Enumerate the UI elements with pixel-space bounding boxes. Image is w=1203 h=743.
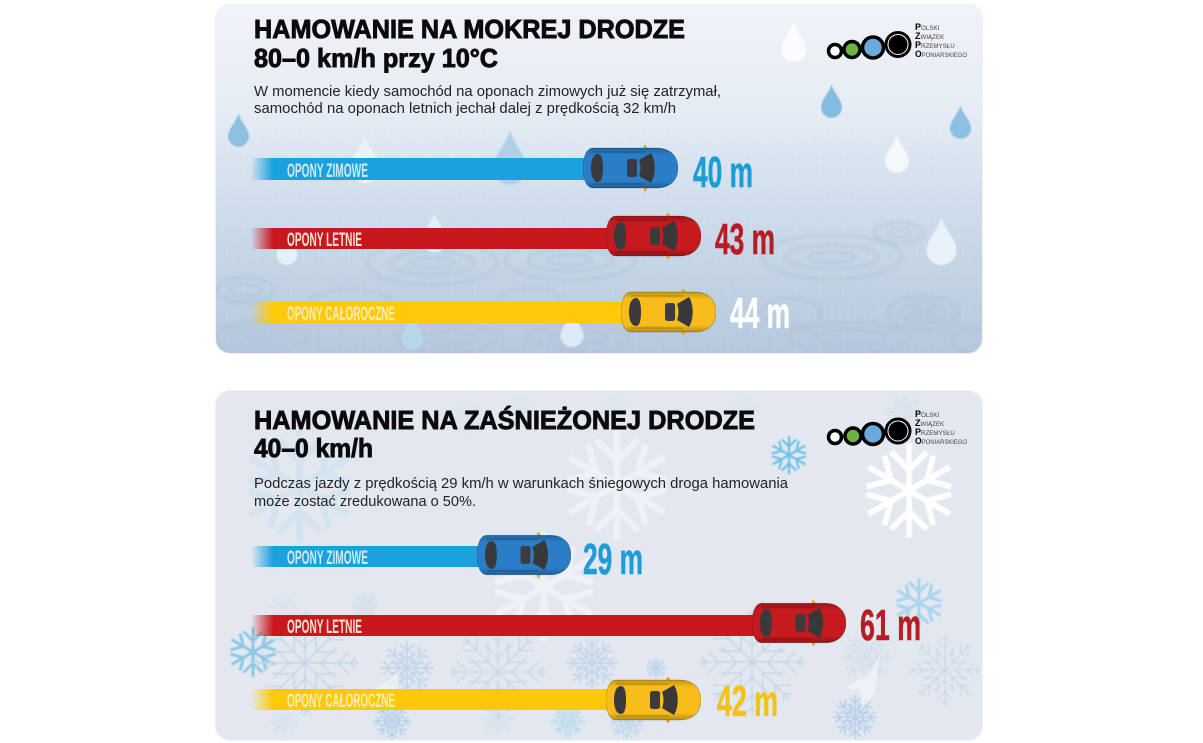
title: wet road: HAMOWANIE NA MOKREJ DRODZE: [254, 14, 685, 44]
bar: summer tyres 43 m: [251, 213, 775, 264]
bar: summer tyres 61 m: OPONY LETNIE: [287, 617, 362, 638]
snowflakes: [227, 392, 981, 740]
bar: winter tyres 40 m: OPONY ZIMOWE: [287, 161, 368, 182]
bar: summer tyres 61 m: [251, 600, 921, 650]
logo: PZPO: POLSKI: [915, 409, 940, 419]
logo: PZPO: [828, 22, 967, 59]
bar: all-season tyres 44 m: OPONY CAŁOROCZNE: [287, 304, 395, 325]
title: snowy road: HAMOWANIE NA ZAŚNIEŻONEJ DRODZE: [254, 405, 755, 435]
title: wet road: 80–0 km/h przy 10°C: [254, 43, 498, 73]
bar: winter tyres 29 m: [251, 532, 643, 584]
description: snowy road: Podczas jazdy z prędkością 29 km/h w warunkach śniegowych droga hamowania: [254, 476, 789, 492]
description: snowy road: może zostać zredukowana o 50%.: [254, 494, 476, 510]
logo: PZPO: OPONIARSKIEGO: [915, 49, 967, 59]
title: snowy road: 40–0 km/h: [254, 433, 373, 463]
bar: winter tyres 40 m: 40 m: [693, 148, 753, 197]
bar: summer tyres 61 m: 61 m: [860, 601, 921, 650]
description: wet road: W momencie kiedy samochód na oponach zimowych już się zatrzymał,: [254, 84, 721, 100]
logo: PZPO: PRZEMYSŁU: [915, 427, 955, 437]
bar: all-season tyres 42 m: [251, 677, 778, 726]
logo: PZPO: OPONIARSKIEGO: [915, 436, 967, 446]
panel: wet road braking: [214, 5, 992, 353]
logo: PZPO: PRZEMYSŁU: [915, 40, 955, 50]
water drops: [228, 22, 971, 350]
bar: winter tyres 29 m: 29 m: [583, 535, 643, 584]
puddle ripples: [220, 222, 948, 330]
bar: summer tyres 43 m: 43 m: [715, 215, 775, 264]
ice shard: [847, 657, 880, 707]
title: wet road: [254, 14, 685, 73]
panel: snowy road braking: [216, 391, 982, 740]
logo: PZPO: [828, 409, 967, 446]
bar: all-season tyres 42 m: OPONY CAŁOROCZNE: [287, 691, 395, 712]
description: snowy road: [254, 476, 789, 510]
bar: all-season tyres 44 m: 44 m: [730, 289, 790, 338]
bar: winter tyres 29 m: OPONY ZIMOWE: [287, 548, 368, 569]
description: wet road: samochód na oponach letnich jechał dalej z prędkością 32 km/h: [254, 101, 676, 117]
bar: all-season tyres 44 m: [251, 289, 790, 338]
bar: winter tyres 40 m: [251, 145, 753, 197]
logo: PZPO: POLSKI: [915, 22, 940, 32]
logo: PZPO: ZWIĄZEK: [915, 418, 945, 428]
description: wet road: [254, 84, 721, 117]
bar: all-season tyres 42 m: 42 m: [717, 677, 778, 726]
title: snowy road: [254, 405, 755, 463]
logo: PZPO: ZWIĄZEK: [915, 31, 945, 41]
bar: summer tyres 43 m: OPONY LETNIE: [287, 230, 362, 251]
